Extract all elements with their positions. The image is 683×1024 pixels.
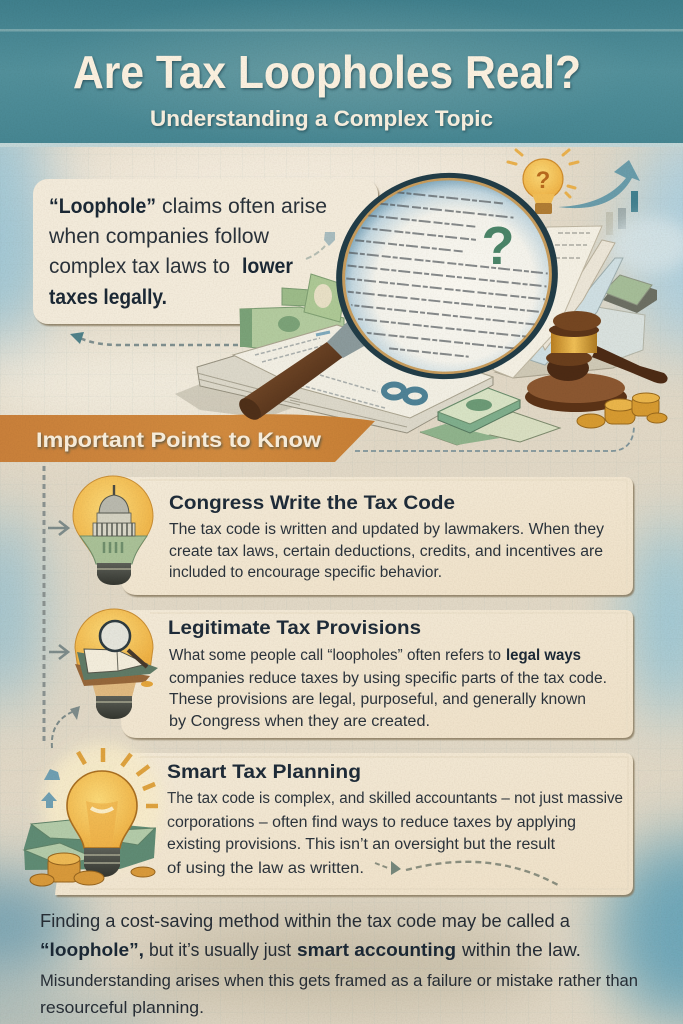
orange banner [0,414,375,462]
footer paragraph: within the law. [461,940,581,960]
illustration: money behind the lens [240,274,345,348]
small dashed arrow near lens [306,232,335,259]
intro callout panel [33,179,378,324]
card body [169,521,604,581]
card body: legal ways [506,647,581,664]
small blue arrows [41,769,60,808]
card heading: Congress Write the Tax Code [169,492,455,514]
dashed arrow in card [375,861,558,885]
card body: What some people call “loopholes” often refers to [169,647,501,664]
callout text: taxes legally. [49,286,167,309]
card body: existing provisions. This isn’t an oversight but the result [167,836,556,853]
money stack [24,820,156,870]
arrow to card two [49,645,68,659]
subtitle: Understanding a Complex Topic [150,106,493,131]
title: Are Tax Loopholes Real? [73,46,581,98]
icon: question-mark light bulb: ? [536,167,550,194]
callout text: claims often arise [162,195,327,218]
banner heading: Important Points to Know [36,429,322,452]
card body [167,790,623,877]
coins [30,853,155,886]
footer paragraph: resourceful planning. [40,998,204,1017]
callout text: lower [242,255,293,278]
card body: The tax code is written and updated by lawmakers. When they [169,521,604,538]
icon: question-mark light bulb [508,150,578,214]
decorative lens text lines [346,192,548,358]
card body [169,647,607,730]
icon: capitol bulb [73,476,153,585]
footer paragraph [40,911,638,1017]
card body: The tax code is complex, and skilled accountants – not just massive [167,790,623,807]
icon: coins [577,393,667,428]
card: legitimate provisions [121,610,633,738]
footer paragraph: “loophole”, [40,940,144,960]
card heading: Smart Tax Planning [167,761,361,783]
card body: by Congress when they are created. [169,713,430,730]
footer paragraph: but it’s usually just [149,940,291,960]
footer paragraph: Misunderstanding arises when this gets framed as a failure or mistake rather than [40,971,638,990]
illustration: open book and documents [175,325,493,433]
card body: included to encourage specific behavior. [169,564,442,581]
card: congress [121,477,633,595]
card body: These provisions are legal, purposeful, and generally known [169,691,586,708]
footer paragraph: Finding a cost-saving method within the tax code may be called a [40,911,571,931]
infinity-like mark [384,384,425,402]
callout text: when companies follow [48,225,270,248]
icon: book bulb [75,609,158,719]
illustration: banknote stack [420,388,560,445]
card heading: Legitimate Tax Provisions [168,617,421,639]
lens question mark: ? [482,216,514,276]
curved dashed arrow up [52,706,80,748]
card body: create tax laws, certain deductions, credits, and incentives are [169,543,603,560]
illustration: rising arrow and candles [558,160,683,273]
icon: gavel [525,311,668,412]
callout text: “Loophole” [49,195,156,218]
icon: glowing bulb with money [24,743,162,886]
card: smart planning [55,753,633,895]
callout text [48,195,327,309]
footer paragraph: smart accounting [297,940,456,960]
card body: corporations – often find ways to reduce taxes by applying [167,814,576,831]
icon: magnifying glass [239,172,558,420]
illustration: paper stack right [493,226,657,378]
dashed arrow under callout [70,332,238,345]
arrow to card one [48,521,68,535]
card body: companies reduce taxes by using specific parts of the tax code. [169,670,607,687]
vertical dashed timeline [42,466,46,742]
card body: of using the law as written. [167,860,364,877]
dashed route line [355,425,634,451]
magnifier handle [235,322,366,424]
callout text: complex tax laws to [49,255,230,278]
header band [0,0,683,147]
